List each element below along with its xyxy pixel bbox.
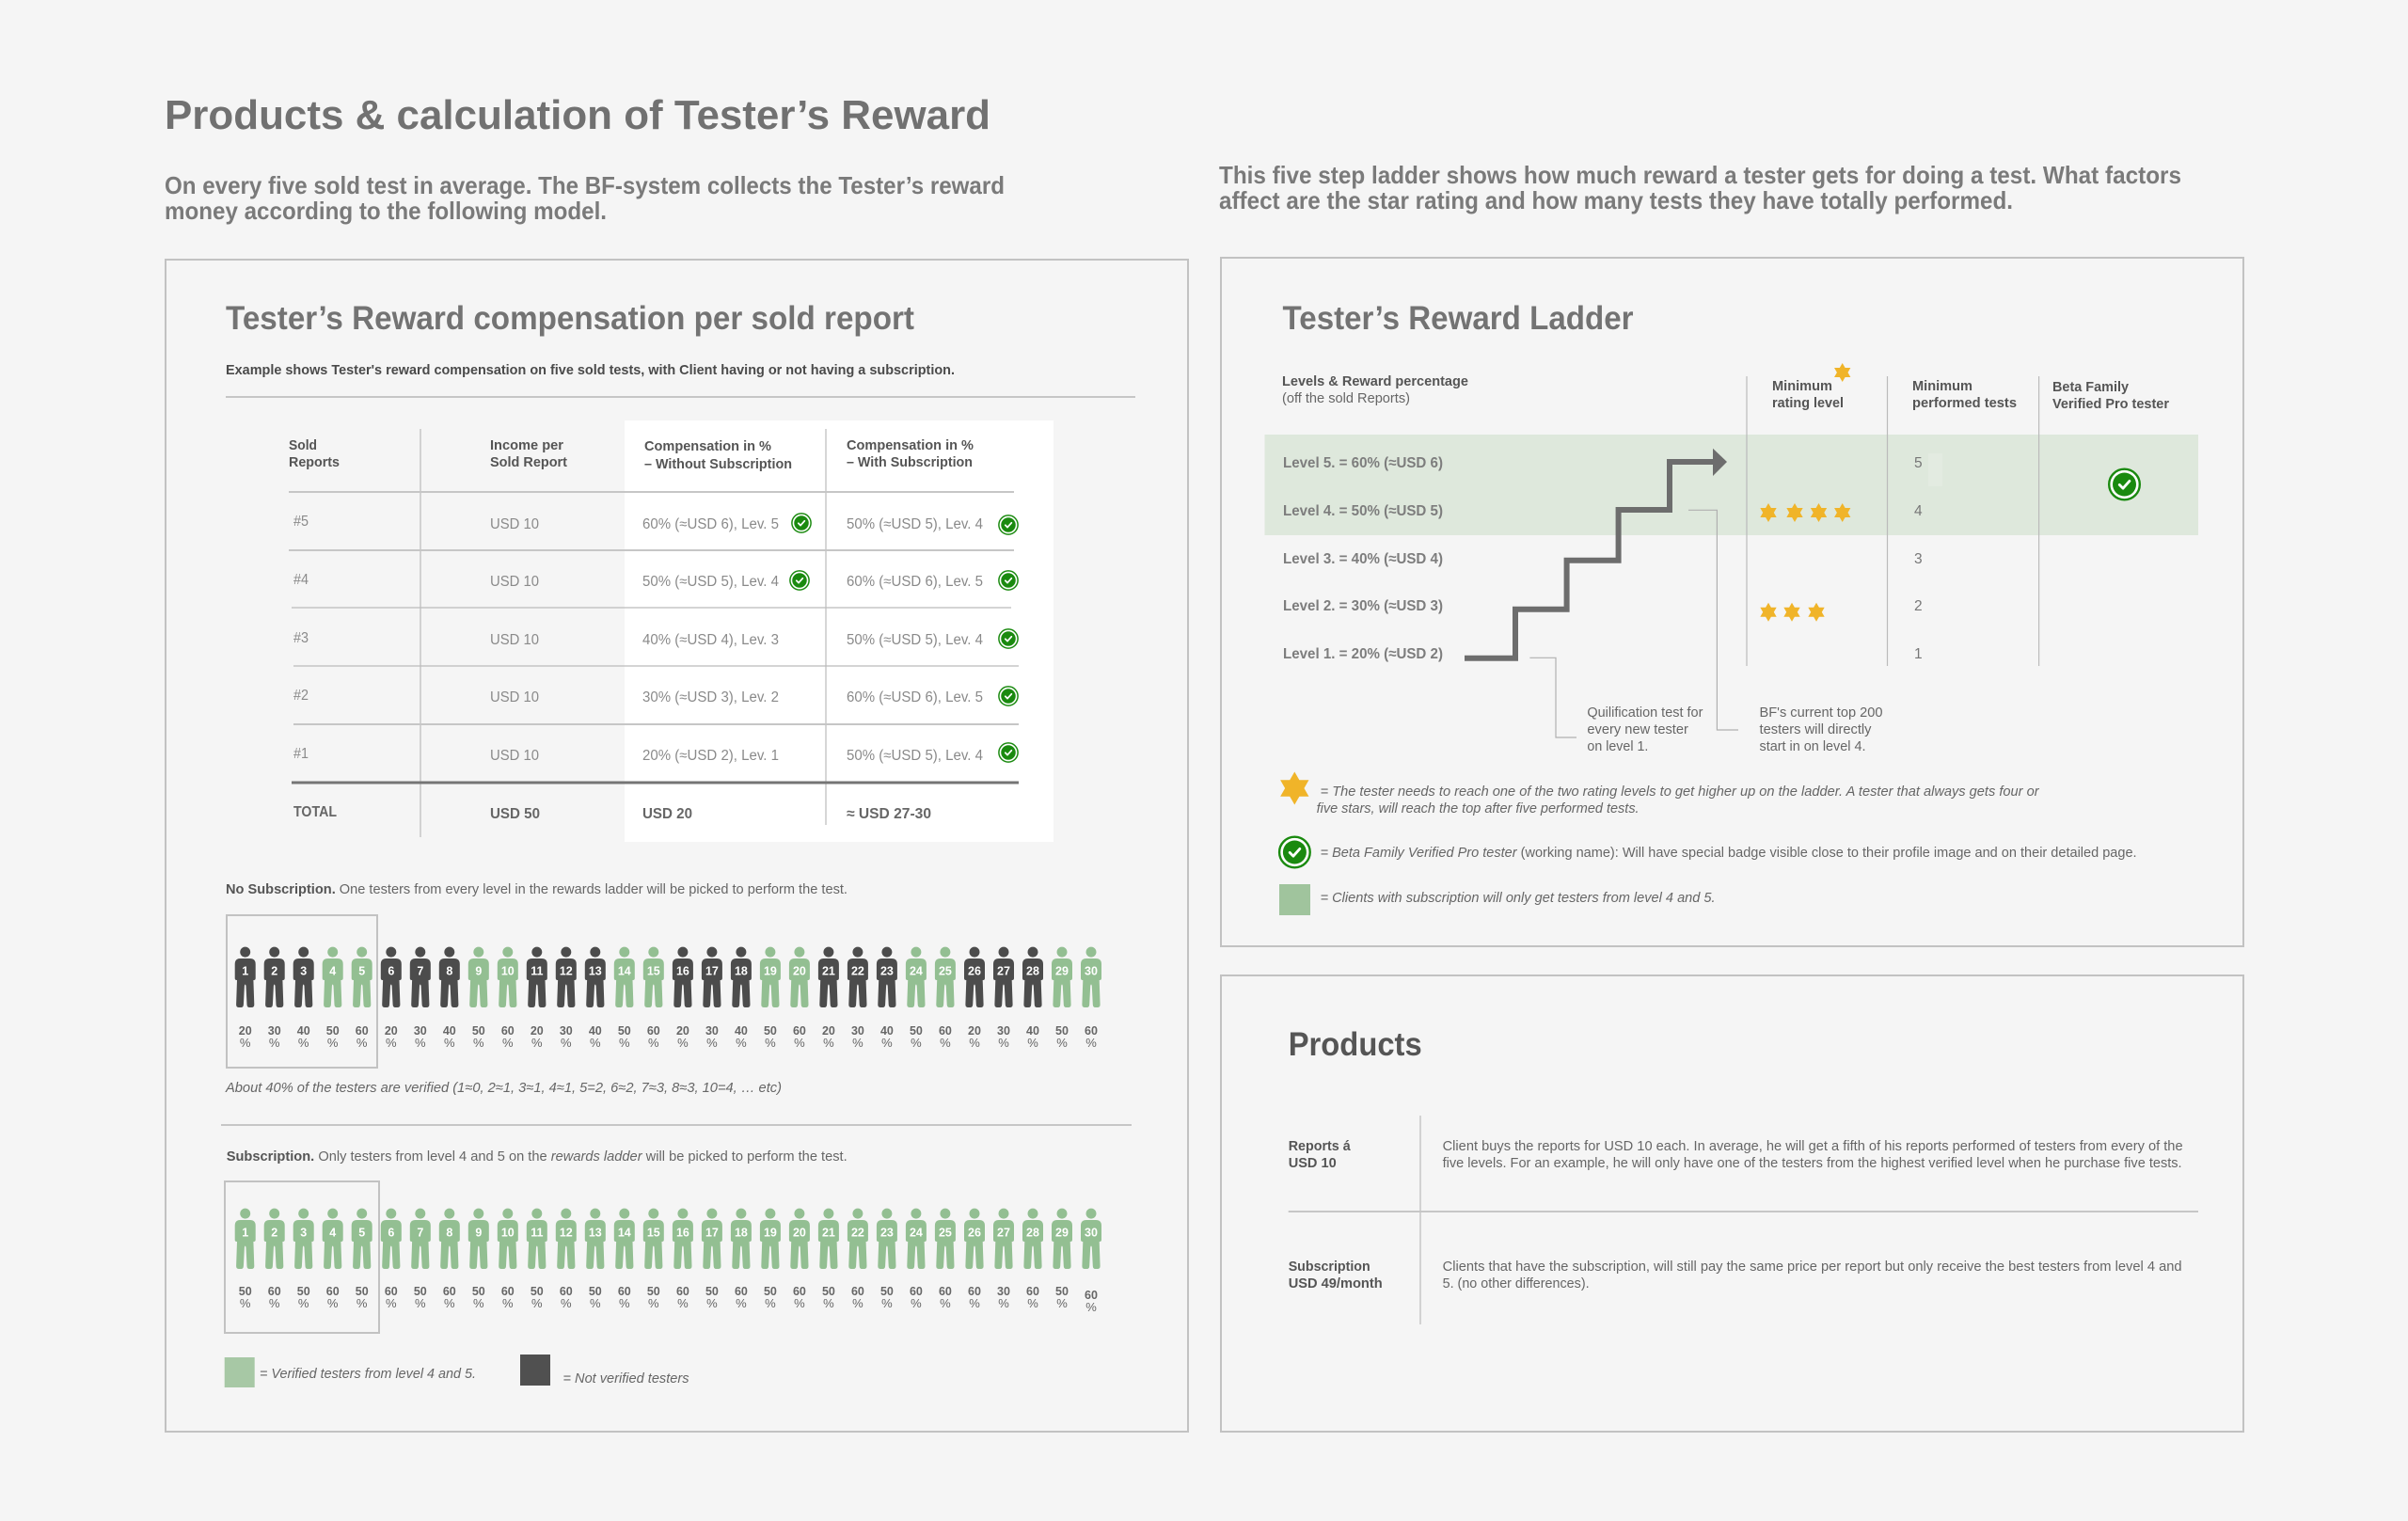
pictogram row: no subscription: 29 (1055, 965, 1069, 978)
pictogram row: no subscription: 50 (1055, 1024, 1069, 1038)
pictogram row: no subscription (235, 947, 1101, 1050)
pictogram row: no subscription: 14 (618, 965, 631, 978)
pictogram row: subscription: % (677, 1296, 689, 1310)
callout: top 200 testers: testers will directly (1759, 721, 1872, 737)
pictogram row: subscription: 50 (356, 1285, 369, 1298)
callout: qualification test: every new tester (1587, 721, 1688, 737)
pictogram row: no subscription: % (911, 1036, 922, 1050)
pictogram row: no subscription: 4 (329, 965, 336, 978)
table row 1 (293, 743, 1018, 764)
pictogram row: no subscription: 20 (968, 1024, 981, 1038)
pictogram row: no subscription: % (386, 1036, 397, 1050)
pictogram row: subscription: 50 (880, 1285, 894, 1298)
pictogram row: subscription: 5 (358, 1227, 365, 1240)
icon: verified badge (2109, 469, 2140, 499)
pictogram row: no subscription: % (794, 1036, 805, 1050)
pictogram row: subscription: % (327, 1296, 339, 1310)
legend: verified badge (1279, 837, 2137, 867)
pictogram row: no subscription: 23 (880, 965, 894, 978)
intro text: right: This five step ladder shows how much reward a tester gets for doing a test. What factors (1219, 161, 2181, 189)
pictogram row: subscription: 60 (1085, 1289, 1098, 1302)
pictogram row: no subscription: 40 (589, 1024, 602, 1038)
pictogram row: subscription: 3 (300, 1227, 307, 1240)
level labels: Level 1. = 20% (≈USD 2) (1283, 646, 1443, 662)
table row 3 (293, 629, 1018, 648)
pictogram row: no subscription: 3 (300, 965, 307, 978)
pictogram row: subscription: 20 (793, 1227, 806, 1240)
table row 2: USD 10 (490, 689, 539, 705)
pictogram row: no subscription: 60 (356, 1024, 369, 1038)
pictogram row: subscription: 8 (446, 1227, 452, 1240)
pictogram row: subscription: 26 (968, 1227, 981, 1240)
legend: star: five stars, will reach the top after five performed tests. (1317, 800, 1640, 816)
table header: Income per (490, 437, 563, 453)
table header (289, 437, 974, 472)
column header: minimum rating level: Minimum (1772, 378, 1832, 394)
pictogram row: subscription: % (561, 1296, 572, 1310)
pictogram row: no subscription: 60 (939, 1024, 952, 1038)
pictogram row: subscription: % (1085, 1300, 1097, 1314)
pictogram row: no subscription: % (531, 1036, 543, 1050)
pictogram row: no subscription: % (706, 1036, 718, 1050)
pictogram row: no subscription: % (852, 1036, 863, 1050)
level labels (1283, 455, 1443, 662)
pictogram row: no subscription: % (327, 1036, 339, 1050)
pictogram row: no subscription: 30 (705, 1024, 719, 1038)
pictogram row: subscription: % (852, 1296, 863, 1310)
pictogram row: subscription: 60 (939, 1285, 952, 1298)
pictogram row: no subscription: 11 (531, 965, 543, 978)
column header: verified pro tester: Verified Pro tester (2052, 396, 2169, 412)
pictogram row: no subscription: 50 (764, 1024, 777, 1038)
pictogram row: no subscription: 20 (793, 965, 806, 978)
column header: levels: Levels & Reward percentage (1282, 373, 1468, 389)
pictogram row: no subscription: 10 (501, 965, 515, 978)
panel: Tester's Reward compensation (166, 260, 1188, 1432)
pictogram row: no subscription: 30 (560, 1024, 573, 1038)
pictogram row: no subscription: 26 (968, 965, 981, 978)
pictogram row: subscription: % (881, 1296, 893, 1310)
table row 1: USD 10 (490, 748, 539, 764)
pictogram row: no subscription: 50 (472, 1024, 485, 1038)
pictogram row: subscription: % (911, 1296, 922, 1310)
pictogram row: no subscription: 30 (1085, 965, 1098, 978)
pictogram row: subscription: 21 (822, 1227, 835, 1240)
pictogram row: no subscription: 22 (851, 965, 864, 978)
pictogram row: subscription: % (940, 1296, 951, 1310)
table row 1: #1 (293, 746, 309, 762)
pictogram row: subscription: % (619, 1296, 630, 1310)
product: subscription: USD 49/month (1289, 1275, 1383, 1291)
pictogram row: no subscription: 17 (705, 965, 719, 978)
staircase arrow (1465, 449, 1727, 658)
pictogram row: subscription: 15 (647, 1227, 660, 1240)
pictogram row: subscription: 4 (329, 1227, 336, 1240)
pictogram row: no subscription: 6 (388, 965, 394, 978)
table row 3: #3 (293, 630, 309, 646)
pictogram row: subscription: 7 (417, 1227, 423, 1240)
product: subscription: 5. (no other differences). (1443, 1275, 1590, 1291)
pictogram row: subscription: 30 (997, 1285, 1010, 1298)
pictogram row: subscription: % (415, 1296, 426, 1310)
product: subscription (1289, 1259, 2182, 1291)
table header: Compensation in % (644, 438, 771, 454)
table row 4: #4 (293, 572, 309, 588)
pictogram row: no subscription: 20 (239, 1024, 252, 1038)
callout: qualification test (1529, 658, 1703, 754)
product: subscription: Clients that have the subscription, will still pay the same price per report but only receive the best testers from level 4 and (1443, 1259, 2182, 1275)
title: Products & calculation of Tester’s Reward (165, 92, 990, 138)
legend: star (1280, 771, 2040, 816)
pictogram row: no subscription: % (736, 1036, 747, 1050)
table row 2: 60% (≈USD 6), Lev. 5 (847, 689, 983, 705)
pictogram row: subscription: 50 (589, 1285, 602, 1298)
pictogram row: no subscription: % (765, 1036, 776, 1050)
pictogram row: subscription: % (444, 1296, 455, 1310)
table total row (293, 804, 931, 822)
table row 2: #2 (293, 688, 309, 704)
pictogram row: no subscription: % (969, 1036, 980, 1050)
level labels: Level 3. = 40% (≈USD 4) (1283, 551, 1443, 567)
products heading: Products (1289, 1026, 1422, 1063)
pictogram row: no subscription: % (1027, 1036, 1038, 1050)
pictogram row: no subscription: 9 (475, 965, 482, 978)
level labels: Level 2. = 30% (≈USD 3) (1283, 598, 1443, 614)
table header: Sold Report (490, 454, 567, 470)
pictogram row: subscription: 50 (1055, 1285, 1069, 1298)
legend: verified testers: = Verified testers from level 4 and 5. (260, 1366, 476, 1382)
product: subscription: Subscription (1289, 1259, 1370, 1275)
table row 4: 50% (≈USD 5), Lev. 4 (642, 574, 779, 590)
pictogram row: subscription: 60 (326, 1285, 340, 1298)
pictogram row: no subscription: 60 (793, 1024, 806, 1038)
pictogram row: subscription: 30 (1085, 1227, 1098, 1240)
pictogram row: no subscription: 1 (242, 965, 248, 978)
pictogram row: no subscription: 30 (851, 1024, 864, 1038)
pictogram row: no subscription: 30 (414, 1024, 427, 1038)
panel: Tester's Reward Ladder (1221, 258, 2243, 946)
pictogram row: subscription: 10 (501, 1227, 515, 1240)
minimum performed tests values: 4 (1914, 503, 1923, 519)
pictogram row: subscription: 23 (880, 1227, 894, 1240)
pictogram row: subscription: 60 (910, 1285, 923, 1298)
table row 2: 30% (≈USD 3), Lev. 2 (642, 689, 779, 705)
column header: verified pro tester: Beta Family (2052, 379, 2130, 395)
pictogram row: no subscription: % (881, 1036, 893, 1050)
table row 3: 50% (≈USD 5), Lev. 4 (847, 632, 983, 648)
pictogram row: no subscription: % (677, 1036, 689, 1050)
pictogram row: subscription: % (502, 1296, 514, 1310)
pictogram row: subscription: 50 (472, 1285, 485, 1298)
column header: minimum performed tests (1912, 378, 2017, 411)
pictogram row: subscription: 60 (851, 1285, 864, 1298)
table header: – Without Subscription (644, 456, 792, 472)
pictogram row: no subscription: 40 (1026, 1024, 1039, 1038)
product: reports: USD 10 (1289, 1155, 1337, 1171)
intro text: left: money according to the following model. (165, 197, 607, 225)
column header: levels: (off the sold Reports) (1282, 390, 1410, 406)
pictogram row: subscription: 60 (1026, 1285, 1039, 1298)
pictogram row: no subscription: % (619, 1036, 630, 1050)
pictogram row: no subscription: % (823, 1036, 834, 1050)
pictogram row: no subscription: % (240, 1036, 251, 1050)
pictogram row: subscription: % (736, 1296, 747, 1310)
pictogram row: no subscription: 40 (735, 1024, 748, 1038)
pictogram row: no subscription: 50 (618, 1024, 631, 1038)
pictogram row: subscription: % (648, 1296, 659, 1310)
pictogram row: no subscription: 20 (531, 1024, 544, 1038)
legend: verified testers (225, 1357, 476, 1387)
pictogram row: no subscription: % (940, 1036, 951, 1050)
pictogram row: subscription: 11 (531, 1227, 543, 1240)
pictogram row: subscription: % (386, 1296, 397, 1310)
table row 5: 60% (≈USD 6), Lev. 5 (642, 516, 779, 532)
note: verified share: About 40% of the testers are verified (1≈0, 2≈1, 3≈1, 4≈1, 5=2, 6≈2, 7≈3, 8≈3, 10=4, … etc) (225, 1080, 782, 1096)
intro text: left: On every five sold test in average. The BF-system collects the Tester’s reward (165, 171, 1005, 199)
pictogram row: no subscription: 24 (910, 965, 923, 978)
pictogram row: no subscription: 28 (1026, 965, 1039, 978)
pictogram row: no subscription: % (444, 1036, 455, 1050)
highlight box: first five testers, no subscription (227, 915, 377, 1068)
pictogram row: no subscription: 30 (268, 1024, 281, 1038)
pictogram row: subscription: 16 (676, 1227, 689, 1240)
pictogram row: no subscription: % (1085, 1036, 1097, 1050)
table row 2 (293, 687, 1018, 705)
pictogram row: subscription: 60 (968, 1285, 981, 1298)
pictogram row: no subscription: % (415, 1036, 426, 1050)
minimum performed tests values: 3 (1914, 551, 1923, 567)
subscription heading: Subscription. Only testers from level 4 and 5 on the rewards ladder will be picked to perform the test. (227, 1149, 848, 1165)
pictogram row: subscription: 50 (297, 1285, 310, 1298)
pictogram row: subscription: 60 (618, 1285, 631, 1298)
pictogram row: no subscription: % (269, 1036, 280, 1050)
pictogram row: subscription: 2 (271, 1227, 277, 1240)
pictogram row: subscription: 60 (735, 1285, 748, 1298)
table row 4: USD 10 (490, 574, 539, 590)
panel heading: Tester’s Reward compensation per sold report (226, 300, 914, 337)
pictogram row: subscription: 60 (560, 1285, 573, 1298)
column header: levels (1282, 373, 1468, 406)
pictogram row: no subscription: 5 (358, 965, 365, 978)
level labels: Level 5. = 60% (≈USD 6) (1283, 455, 1443, 471)
pictogram row: subscription: % (794, 1296, 805, 1310)
pictogram row: no subscription: 18 (735, 965, 748, 978)
three star rating (1760, 603, 1825, 622)
pictogram row: no subscription: 40 (297, 1024, 310, 1038)
table row 3: USD 10 (490, 632, 539, 648)
table row 1: 20% (≈USD 2), Lev. 1 (642, 748, 779, 764)
pictogram row: subscription: % (590, 1296, 601, 1310)
table row 4: 60% (≈USD 6), Lev. 5 (847, 574, 983, 590)
pictogram row: subscription: 50 (239, 1285, 252, 1298)
table row 4 (293, 571, 1018, 590)
pictogram row: no subscription: % (561, 1036, 572, 1050)
pictogram row: no subscription: 19 (764, 965, 777, 978)
product: reports: Client buys the reports for USD 10 each. In average, he will get a fifth of his reports performed of testers from every of the (1443, 1138, 2183, 1154)
minimum performed tests values: 5 (1914, 455, 1923, 471)
pictogram row: subscription: 14 (618, 1227, 631, 1240)
pictogram row: subscription: 12 (560, 1227, 573, 1240)
pictogram row: subscription: 25 (939, 1227, 952, 1240)
legend: star: = The tester needs to reach one of the two rating levels to get higher up on the ladder. A tester that always gets four or (1321, 784, 2040, 800)
product: reports: five levels. For an example, he will only have one of the testers from the highest verified level when he purchase five tests. (1443, 1155, 2182, 1171)
level labels: Level 4. = 50% (≈USD 5) (1283, 503, 1443, 519)
column header: verified pro tester (2052, 379, 2169, 412)
pictogram row: subscription: % (998, 1296, 1009, 1310)
table row 5: USD 10 (490, 516, 539, 532)
pictogram row: no subscription: % (648, 1036, 659, 1050)
callout: top 200 testers (1688, 510, 1883, 754)
pictogram row: subscription: % (706, 1296, 718, 1310)
pictogram row: subscription: % (473, 1296, 484, 1310)
pictogram row: subscription (235, 1209, 1101, 1314)
pictogram row: no subscription: 2 (271, 965, 277, 978)
pictogram row: subscription: 24 (910, 1227, 923, 1240)
pictogram row: no subscription: % (998, 1036, 1009, 1050)
ladder heading: Tester’s Reward Ladder (1283, 300, 1634, 337)
pictogram row: subscription: % (269, 1296, 280, 1310)
pictogram row: subscription: 17 (705, 1227, 719, 1240)
pictogram row: subscription: % (298, 1296, 309, 1310)
pictogram row: no subscription: 60 (647, 1024, 660, 1038)
four star rating (1760, 503, 1850, 522)
pictogram row: no subscription: 15 (647, 965, 660, 978)
minimum performed tests values (1914, 455, 1923, 662)
pictogram row: subscription: 50 (531, 1285, 544, 1298)
table total row: ≈ USD 27-30 (847, 806, 931, 822)
table row 5: 50% (≈USD 5), Lev. 4 (847, 516, 983, 532)
pictogram row: subscription: 50 (705, 1285, 719, 1298)
pictogram row: subscription: 29 (1055, 1227, 1069, 1240)
pictogram row: no subscription: 21 (822, 965, 835, 978)
pictogram row: subscription: 6 (388, 1227, 394, 1240)
pictogram row: subscription: 60 (501, 1285, 515, 1298)
product: reports: Reports á (1289, 1138, 1351, 1154)
no subscription heading: No Subscription. One testers from every level in the rewards ladder will be picked to perform the test. (226, 881, 848, 897)
pictogram row: no subscription: % (590, 1036, 601, 1050)
pictogram row: no subscription: 30 (997, 1024, 1010, 1038)
callout: top 200 testers: BF's current top 200 (1759, 705, 1883, 721)
pictogram row: no subscription: % (356, 1036, 368, 1050)
minimum performed tests values: 1 (1914, 646, 1923, 662)
pictogram row: subscription: % (240, 1296, 251, 1310)
callout: qualification test: on level 1. (1587, 738, 1648, 754)
pictogram row: no subscription: 20 (676, 1024, 689, 1038)
highlight band: levels 4 and 5 (1264, 435, 2198, 535)
pictogram row: subscription: 18 (735, 1227, 748, 1240)
callout: qualification test: Quilification test for (1587, 705, 1703, 721)
highlight box: first five testers, subscription (225, 1181, 379, 1333)
callout: top 200 testers: start in on level 4. (1759, 738, 1866, 754)
table row 1: 50% (≈USD 5), Lev. 4 (847, 748, 983, 764)
pictogram row: no subscription: 60 (1085, 1024, 1098, 1038)
legend: subscription square (1279, 884, 1716, 915)
table row 5 (293, 514, 1018, 534)
pictogram row: no subscription: 50 (326, 1024, 340, 1038)
column header: minimum performed tests: Minimum (1912, 378, 1972, 394)
pictogram row: subscription: 60 (676, 1285, 689, 1298)
pictogram row: subscription: 28 (1026, 1227, 1039, 1240)
compensation table (289, 420, 1054, 842)
pictogram row: subscription: 1 (242, 1227, 248, 1240)
pictogram row: subscription: 50 (647, 1285, 660, 1298)
pictogram row: no subscription: 25 (939, 965, 952, 978)
pictogram row: no subscription: 20 (385, 1024, 398, 1038)
minimum performed tests values: 2 (1914, 598, 1923, 614)
table row 3: 40% (≈USD 4), Lev. 3 (642, 632, 779, 648)
legend: not verified testers (520, 1355, 689, 1386)
legend: verified badge: = Beta Family Verified Pro tester (working name): Will have special badge visible close to their profile image and on their detailed page. (1321, 845, 2137, 861)
pictogram row: subscription: 60 (268, 1285, 281, 1298)
table header: – With Subscription (847, 454, 973, 470)
pictogram row: no subscription: 40 (880, 1024, 894, 1038)
table total row: TOTAL (293, 804, 337, 820)
pictogram row: subscription: 60 (793, 1285, 806, 1298)
pictogram row: no subscription: 50 (910, 1024, 923, 1038)
column header: minimum rating level (1772, 363, 1850, 411)
pictogram row: no subscription: % (298, 1036, 309, 1050)
table header: Sold (289, 437, 317, 453)
table total row: USD 50 (490, 806, 540, 822)
pictogram row: subscription: % (1027, 1296, 1038, 1310)
pictogram row: subscription: % (823, 1296, 834, 1310)
pictogram row: no subscription: 7 (417, 965, 423, 978)
pictogram row: subscription: 13 (589, 1227, 602, 1240)
pictogram row: subscription: % (1056, 1296, 1068, 1310)
pictogram row: subscription: % (765, 1296, 776, 1310)
legend: subscription square: = Clients with subscription will only get testers from level 4 and 5. (1321, 890, 1716, 906)
pictogram row: no subscription: 60 (501, 1024, 515, 1038)
pictogram row: subscription: 9 (475, 1227, 482, 1240)
intro text: right: affect are the star rating and how many tests they have totally performed. (1219, 186, 2013, 214)
pictogram row: no subscription: % (473, 1036, 484, 1050)
pictogram row: subscription: % (531, 1296, 543, 1310)
pictogram row: no subscription: 20 (822, 1024, 835, 1038)
pictogram row: no subscription: % (502, 1036, 514, 1050)
pictogram row: subscription: 22 (851, 1227, 864, 1240)
pictogram row: no subscription: 8 (446, 965, 452, 978)
pictogram row: subscription: 27 (997, 1227, 1010, 1240)
product: reports (1289, 1138, 2183, 1171)
pictogram row: subscription: % (969, 1296, 980, 1310)
panel: Products (1221, 975, 2243, 1432)
pictogram row: subscription: 60 (385, 1285, 398, 1298)
pictogram row: subscription: % (356, 1296, 368, 1310)
pictogram row: no subscription: 13 (589, 965, 602, 978)
pictogram row: subscription: 19 (764, 1227, 777, 1240)
pictogram row: no subscription: 27 (997, 965, 1010, 978)
table row 5: #5 (293, 514, 309, 530)
pictogram row: no subscription: 12 (560, 965, 573, 978)
intro text: right (1219, 161, 2181, 214)
pictogram row: no subscription: 40 (443, 1024, 456, 1038)
table header: Reports (289, 454, 340, 470)
pictogram row: no subscription: % (1056, 1036, 1068, 1050)
pictogram row: subscription: 50 (414, 1285, 427, 1298)
legend: not verified testers: = Not verified testers (562, 1370, 689, 1386)
pictogram row: subscription: 60 (443, 1285, 456, 1298)
table header: Compensation in % (847, 437, 974, 453)
pictogram row: no subscription: 16 (676, 965, 689, 978)
column header: minimum rating level: rating level (1772, 395, 1844, 411)
pictogram row: subscription: 50 (764, 1285, 777, 1298)
table total row: USD 20 (642, 806, 692, 822)
column header: minimum performed tests: performed tests (1912, 395, 2017, 411)
panel description: Example shows Tester's reward compensation on five sold tests, with Client having or not having a subscription. (226, 362, 955, 378)
pictogram row: subscription: 50 (822, 1285, 835, 1298)
intro text: left (165, 171, 1005, 225)
